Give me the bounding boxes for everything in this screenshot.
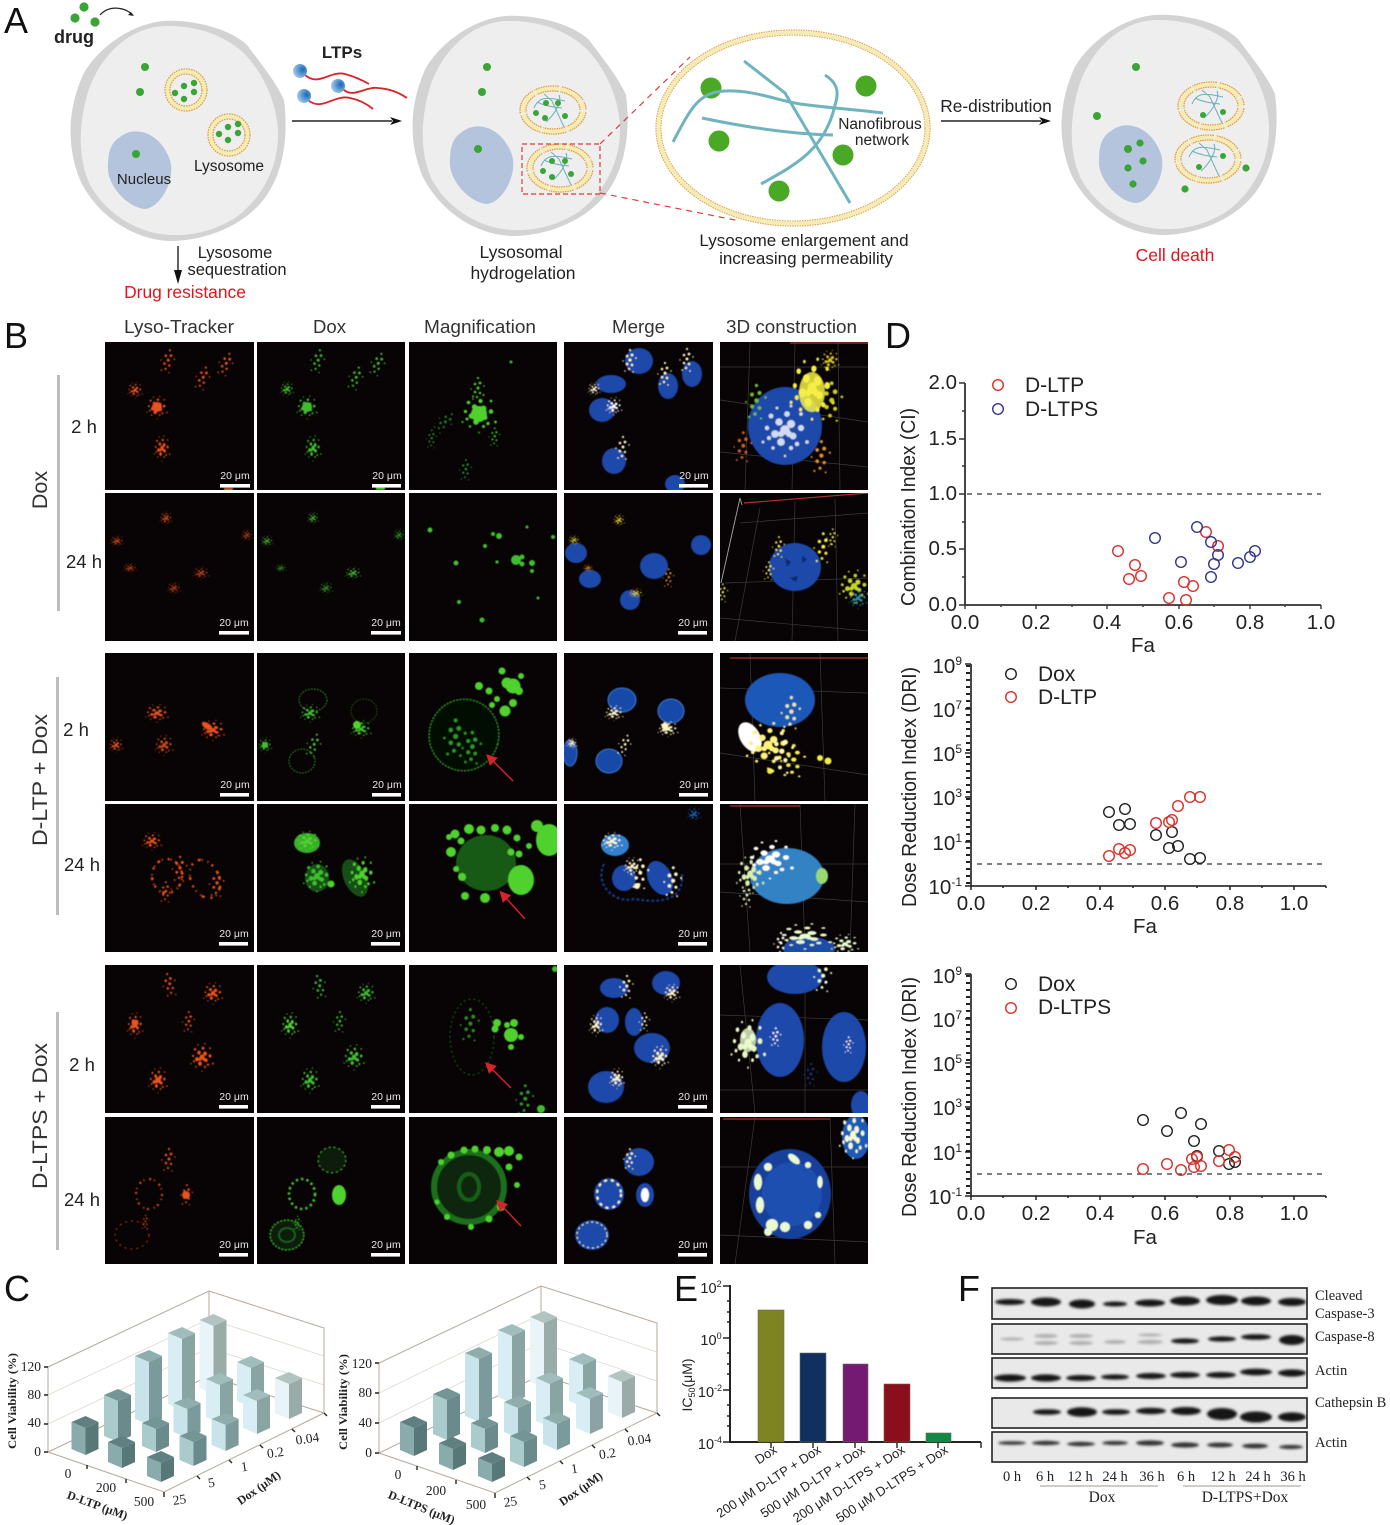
micrograph: D-LTPS 2 h 3D	[720, 965, 868, 1113]
group label: D-LTPS + Dox: 2 h	[69, 1054, 95, 1075]
western blot: Actin 2	[992, 1432, 1348, 1462]
blot time and treatment labels: 24 h	[1245, 1469, 1271, 1485]
chart: DRI with D-LTPS: 0.4	[1086, 1202, 1114, 1225]
micrograph: D-LTP 24 h Dox: 20 μm	[371, 928, 401, 940]
axis labels: Cell Viability (%)	[336, 1354, 350, 1450]
western blot: Actin 1	[992, 1358, 1348, 1388]
3D bar chart: D-LTP: 5	[207, 1475, 216, 1490]
group label: D-LTPS + Dox	[29, 1012, 100, 1250]
chart: Combination Index vs Fa: Fa	[1131, 634, 1156, 657]
chart: DRI with D-LTP: Fa	[1133, 915, 1158, 938]
chart: DRI with D-LTPS: Dose Reduction Index (DRI)	[898, 977, 921, 1217]
chart: DRI with D-LTP: 10	[932, 699, 955, 722]
panel A: cell death stage	[1062, 15, 1277, 235]
leaky lysosome, lower	[1175, 135, 1241, 183]
zoom connector lines	[600, 57, 740, 221]
micrograph: D-LTP 2 h 3D	[720, 653, 868, 801]
column headings: Magnification	[424, 317, 536, 337]
micrograph: D-LTPS 24 h Lyso-Tracker: 20 μm	[219, 1239, 249, 1251]
chart: Combination Index vs Fa: Combination Index (CI)	[897, 408, 920, 606]
legend: D-LTPS	[1038, 996, 1111, 1019]
enlarged lysosome with nanofibrous network	[656, 30, 930, 226]
chart: DRI with D-LTPS: Fa	[1133, 1226, 1158, 1249]
3D bar chart: D-LTP: 0.2	[266, 1444, 285, 1461]
chart: DRI with D-LTP: 10	[932, 832, 955, 855]
micrograph: Dox 2 h Dox	[257, 342, 405, 490]
lysosome sequestration outcome: sequestration	[187, 261, 287, 279]
column headings	[124, 317, 857, 337]
micrograph: D-LTPS 2 h merge	[564, 965, 713, 1113]
chart: DRI with D-LTP: 5	[955, 742, 962, 756]
bar chart: IC50: 2	[717, 1279, 722, 1289]
chart: DRI with D-LTP: 3	[955, 786, 962, 800]
column headings: Dox	[313, 317, 346, 337]
D-LTP points	[1113, 527, 1223, 605]
chart: DRI with D-LTPS: 5	[955, 1052, 962, 1066]
chart: DRI with D-LTPS: 10	[932, 965, 955, 988]
micrograph: D-LTPS 2 h merge: 20 μm	[678, 1091, 708, 1103]
chart: Combination Index vs Fa: 1.0	[928, 482, 957, 505]
micrograph: Dox 24 h magnification	[409, 493, 557, 641]
micrograph: D-LTPS 24 h Dox	[257, 1117, 405, 1264]
label: Lysosome enlargement: increasing permeability	[719, 249, 893, 268]
micrograph: Dox 2 h Dox: 20 μm	[372, 470, 402, 482]
column headings: 3D construction	[726, 317, 857, 337]
bar chart: IC50: 10	[698, 1437, 714, 1453]
axis labels: Cell Viability (%)	[5, 1353, 19, 1449]
lysosome sequestration outcome	[124, 244, 287, 302]
micrograph: D-LTPS 24 h merge	[564, 1117, 713, 1264]
micrograph: D-LTPS 24 h magnification	[409, 1117, 557, 1264]
blot time and treatment labels: 6 h	[1036, 1469, 1055, 1485]
zoom box	[522, 144, 600, 194]
chart: DRI with D-LTP: 0.6	[1151, 892, 1179, 915]
chart: Combination Index vs Fa: 0.8	[1236, 611, 1264, 634]
chart: DRI with D-LTPS: 0.2	[1022, 1202, 1050, 1225]
chart: DRI with D-LTP: -1	[951, 875, 962, 889]
3D bar chart: D-LTPS: 120	[352, 1356, 372, 1371]
chart: DRI with D-LTP: 10	[932, 655, 955, 678]
bar chart: IC50: 50	[687, 1388, 697, 1398]
chart: Combination Index vs Fa: 0.5	[928, 537, 957, 560]
chart: Combination Index vs Fa: 0.6	[1165, 611, 1193, 634]
micrograph: Dox 24 h Lyso-Tracker	[105, 493, 254, 641]
micrograph: Dox 24 h Lyso-Tracker: 20 μm	[219, 617, 249, 629]
legend: Dox	[1038, 663, 1076, 686]
3D bar chart: D-LTPS: 0	[395, 1467, 402, 1482]
label: Lysosome enlargement: Lysosome enlargement and	[699, 231, 909, 250]
chart: DRI with D-LTP: 9	[955, 654, 962, 668]
micrograph: D-LTPS 2 h Lyso-Tracker	[105, 965, 254, 1113]
3D bar chart: D-LTP: 0.04	[295, 1429, 320, 1448]
chart: DRI with D-LTPS	[898, 964, 1326, 1249]
category labels: 500 μM D-LTP + Dox	[758, 1442, 868, 1521]
group label: D-LTP + Dox: 24 h	[64, 854, 100, 875]
panel letter C: C	[4, 1268, 30, 1309]
arrow: LTP treatment	[292, 120, 392, 122]
micrograph: D-LTPS 24 h merge: 20 μm	[678, 1239, 708, 1251]
chart: DRI with D-LTP: 0.4	[1086, 892, 1114, 915]
lysosome with drug, lower	[208, 114, 250, 156]
micrograph: Dox 24 h Dox: 20 μm	[371, 617, 401, 629]
3D bar chart: D-LTPS: 40	[358, 1415, 372, 1430]
chart: Combination Index vs Fa: 0.0	[928, 593, 957, 616]
bar chart: IC50	[679, 1279, 981, 1525]
chart: DRI with D-LTP: 10	[932, 787, 955, 810]
micrograph: Dox 2 h Lyso-Tracker: 20 μm	[220, 470, 250, 482]
label: Lysosome enlargement	[699, 231, 909, 268]
group label: D-LTPS + Dox: 24 h	[64, 1189, 100, 1210]
3D bar chart: D-LTPS: 0.04	[627, 1430, 652, 1449]
bar chart: IC50: IC	[679, 1398, 695, 1412]
icon: free drug dots in cytoplasm	[132, 63, 149, 158]
panel letter E: E	[674, 1268, 698, 1309]
LTPs lipid molecules icon	[293, 43, 407, 109]
blot time and treatment labels: D-LTPS+Dox	[1202, 1489, 1289, 1506]
chart: DRI with D-LTPS: 0.0	[957, 1202, 985, 1225]
chart: DRI with D-LTP	[898, 654, 1326, 938]
category labels: 200 μM D-LTP + Dox	[714, 1442, 824, 1521]
micrograph: Dox 24 h merge: 20 μm	[678, 617, 708, 629]
3D bar chart: D-LTPS: 500	[466, 1497, 486, 1512]
category labels	[714, 1442, 951, 1525]
Dox points	[1104, 804, 1205, 864]
column headings: Lyso-Tracker	[124, 317, 234, 337]
chart: Combination Index vs Fa: 1.0	[1307, 611, 1335, 634]
bar chart: IC50: 10	[700, 1333, 717, 1349]
micrograph: D-LTP 2 h merge	[564, 653, 713, 801]
western blot: Cathepsin B: Cathepsin B	[1315, 1395, 1386, 1411]
micrograph: Dox 2 h merge	[564, 342, 713, 490]
blot time and treatment labels: 24 h	[1102, 1469, 1128, 1485]
label: Lysosomal hydrogelation	[470, 242, 576, 283]
micrograph: Dox 24 h Dox	[257, 493, 405, 641]
drug icon and label	[54, 2, 134, 47]
bar chart: IC50: 0	[717, 1331, 722, 1341]
category labels: Dox	[752, 1442, 780, 1467]
micrograph: D-LTPS 24 h Dox: 20 μm	[371, 1239, 401, 1251]
chart: DRI with D-LTPS: 10	[929, 1186, 951, 1209]
blot time and treatment labels: 36 h	[1139, 1469, 1165, 1485]
chart: Combination Index vs Fa: 0.4	[1093, 611, 1121, 634]
micrograph: D-LTPS 2 h Dox: 20 μm	[371, 1091, 401, 1103]
group label: Dox: 24 h	[66, 551, 102, 572]
drug spheres	[700, 76, 876, 202]
western blot: Cleaved Caspase-3: Cleaved	[1315, 1288, 1363, 1304]
chart: Combination Index vs Fa	[897, 371, 1335, 657]
micrograph: D-LTPS 2 h magnification	[409, 965, 557, 1113]
micrograph: D-LTPS 2 h Lyso-Tracker: 20 μm	[219, 1091, 249, 1103]
group label: D-LTP + Dox: D-LTP + Dox	[29, 713, 52, 846]
chart: DRI with D-LTPS: -1	[951, 1185, 962, 1199]
category labels: 500 μM D-LTPS + Dox	[833, 1442, 951, 1525]
category labels: 200 μM D-LTPS + Dox	[790, 1442, 908, 1525]
enlarged lysosome with nanofibrous network: Nanofibrous	[838, 116, 922, 133]
bar chart: IC50: 10	[700, 1281, 717, 1297]
micrograph: D-LTP 24 h Lyso-Tracker: 20 μm	[219, 928, 249, 940]
D-LTPS points	[1150, 522, 1260, 582]
blot time and treatment labels: 36 h	[1280, 1469, 1306, 1485]
label: Lysosome: Lysosome	[194, 158, 264, 175]
panel A: cell with sequestered drug	[70, 21, 286, 241]
bar chart: IC50: 10	[698, 1385, 714, 1401]
chart: DRI with D-LTP: 0.2	[1022, 892, 1050, 915]
micrograph: D-LTPS 24 h Lyso-Tracker	[105, 1117, 254, 1264]
western blot: Caspase-8: Caspase-8	[1315, 1329, 1375, 1345]
3D bar chart: D-LTPS: 1	[570, 1461, 579, 1476]
3D bar chart: D-LTPS	[336, 1286, 660, 1525]
panel A: cell with lysosomal hydrogelation	[412, 16, 628, 236]
group label: Dox: Dox	[28, 471, 52, 509]
lysosome sequestration outcome: Lysosome	[198, 244, 272, 262]
blot time and treatment labels: 6 h	[1177, 1469, 1196, 1485]
3D bar chart: D-LTP: 25	[172, 1491, 187, 1508]
hydrogelated lysosome, upper	[520, 86, 586, 134]
micrograph: D-LTP 2 h Dox	[257, 653, 405, 801]
3D bar chart: D-LTP: 200	[96, 1480, 116, 1495]
chart: Combination Index vs Fa: 1.5	[928, 427, 957, 450]
micrograph: D-LTP 24 h Lyso-Tracker	[105, 804, 254, 952]
chart: DRI with D-LTP: 1.0	[1280, 892, 1308, 915]
chart: DRI with D-LTPS: 3	[955, 1096, 962, 1110]
3D bar chart: D-LTPS: 0.2	[598, 1445, 617, 1462]
bar chart: IC50: -2	[714, 1383, 722, 1393]
hydrogelated lysosome, lower	[527, 144, 593, 192]
blot time and treatment labels: 12 h	[1067, 1469, 1093, 1485]
micrograph: D-LTP 24 h 3D	[720, 804, 868, 952]
chart: Combination Index vs Fa: 0.2	[1022, 611, 1050, 634]
bar chart: IC50: -4	[714, 1435, 722, 1445]
bar chart: IC50: (μM)	[679, 1358, 695, 1388]
3D bar chart: D-LTP: 40	[28, 1415, 41, 1430]
group label: D-LTP + Dox: 2 h	[63, 719, 89, 740]
LTPs lipid molecules icon: LTPs	[322, 43, 362, 62]
micrograph: Dox 2 h magnification	[409, 342, 557, 490]
micrograph: D-LTP 2 h magnification	[409, 653, 557, 801]
Dox points	[1138, 1108, 1240, 1169]
3D bar chart: D-LTP: 1	[240, 1459, 249, 1474]
micrograph: D-LTP 24 h merge	[564, 804, 713, 952]
chart: DRI with D-LTP: Dose Reduction Index (DRI)	[898, 667, 921, 907]
panel letter D: D	[885, 315, 911, 356]
blot time and treatment labels: 0 h	[1003, 1469, 1022, 1485]
label: Cell death: Cell death	[1136, 245, 1214, 265]
micrograph: D-LTP 24 h merge: 20 μm	[678, 928, 708, 940]
3D bar chart: D-LTP: 500	[134, 1494, 154, 1509]
3D bar chart: D-LTPS: Dox (μM)	[556, 1469, 605, 1509]
western blot: Cleaved Caspase-3	[992, 1288, 1375, 1322]
micrograph: Dox 2 h merge: 20 μm	[679, 470, 709, 482]
3D bar chart: D-LTP: 120	[21, 1359, 41, 1374]
chart: DRI with D-LTPS: 10	[932, 1009, 955, 1032]
micrograph: D-LTP 2 h Lyso-Tracker	[105, 653, 254, 801]
chart: DRI with D-LTPS: 1.0	[1280, 1202, 1308, 1225]
chart: DRI with D-LTP: 10	[929, 876, 951, 899]
chart: DRI with D-LTP: 0.8	[1216, 892, 1244, 915]
panel letter A: A	[4, 0, 28, 41]
micrograph: D-LTP 24 h magnification	[409, 804, 557, 952]
panel letter B: B	[4, 315, 28, 356]
3D bar chart: D-LTPS: 25	[503, 1493, 518, 1510]
chart: DRI with D-LTP: 10	[932, 743, 955, 766]
micrograph: D-LTPS 24 h 3D	[720, 1117, 868, 1264]
blot time and treatment labels: Dox	[1089, 1489, 1116, 1506]
nanofibers	[673, 61, 883, 203]
D-LTPS points	[1138, 1145, 1240, 1175]
chart: DRI with D-LTPS: 0.6	[1151, 1202, 1179, 1225]
legend	[993, 374, 1098, 421]
chart: Combination Index vs Fa: 2.0	[928, 371, 957, 394]
3D bar chart: D-LTPS: 80	[358, 1385, 372, 1400]
legend: D-LTP	[1038, 686, 1097, 709]
chart: DRI with D-LTPS: 9	[955, 964, 962, 978]
micrograph: Dox 2 h Lyso-Tracker	[105, 342, 254, 490]
lysosome sequestration outcome: Drug resistance	[124, 282, 246, 302]
group label: D-LTPS + Dox: D-LTPS + Dox	[29, 1042, 52, 1189]
drug icon and label: drug	[54, 27, 94, 47]
3D bar chart: D-LTPS: 200	[426, 1483, 446, 1498]
chart: DRI with D-LTPS: 10	[932, 1097, 955, 1120]
micrograph: D-LTP 24 h Dox	[257, 804, 405, 952]
3D bar chart: D-LTP: D-LTP (μM)	[65, 1488, 130, 1523]
panel letter F: F	[958, 1268, 980, 1309]
bars	[758, 1310, 951, 1442]
3D bar chart: D-LTP: Dox (μM)	[234, 1468, 283, 1508]
micrograph: Dox 2 h 3D	[720, 342, 868, 490]
western blot: Actin 2: Actin	[1315, 1435, 1348, 1451]
micrograph: Dox 24 h merge	[564, 493, 713, 641]
chart: DRI with D-LTPS: 10	[932, 1142, 955, 1165]
blot time and treatment labels	[1003, 1469, 1306, 1506]
legend	[1006, 973, 1111, 1019]
arrow: Re-distribution: Re-distribution	[940, 96, 1052, 116]
western blot: Cathepsin B	[992, 1395, 1386, 1428]
micrograph: Dox 24 h 3D	[720, 493, 868, 641]
chart: DRI with D-LTPS: 7	[955, 1008, 962, 1022]
enlarged lysosome with nanofibrous network: network	[855, 132, 909, 149]
column headings: Merge	[612, 317, 665, 337]
micrograph: D-LTPS 2 h Dox	[257, 965, 405, 1113]
legend	[1006, 663, 1097, 709]
legend: Dox	[1038, 973, 1076, 996]
western blot: Caspase-8	[992, 1324, 1375, 1354]
western blot: Actin 1: Actin	[1315, 1363, 1348, 1379]
micrograph: D-LTP 2 h Lyso-Tracker: 20 μm	[220, 779, 250, 791]
3D bar chart: D-LTP: 80	[28, 1387, 41, 1402]
3D bar chart: D-LTP: 0	[34, 1444, 41, 1459]
blot time and treatment labels: 12 h	[1210, 1469, 1236, 1485]
chart: DRI with D-LTPS: 1	[955, 1141, 962, 1155]
chart: DRI with D-LTPS: 10	[932, 1053, 955, 1076]
lysosome with drug, upper	[165, 69, 207, 111]
group label: Dox: 2 h	[71, 416, 97, 437]
chart: DRI with D-LTP: 0.0	[957, 892, 985, 915]
D-LTP points	[1104, 792, 1205, 861]
chart: DRI with D-LTP: 1	[955, 831, 962, 845]
micrograph: D-LTP 2 h Dox: 20 μm	[372, 779, 402, 791]
group label: D-LTP + Dox	[29, 677, 100, 915]
3D bar chart: D-LTP	[5, 1291, 327, 1523]
label: Nucleus: Nucleus	[117, 171, 171, 188]
label: Lysosomal hydrogelation: hydrogelation	[470, 263, 576, 283]
group label: Dox	[28, 375, 102, 611]
legend: D-LTPS	[1025, 398, 1098, 421]
legend: D-LTP	[1025, 374, 1084, 397]
chart: DRI with D-LTPS: 0.8	[1216, 1202, 1244, 1225]
micrograph: D-LTP 2 h merge: 20 μm	[679, 779, 709, 791]
chart: DRI with D-LTP: 7	[955, 698, 962, 712]
leaky lysosome, upper	[1178, 82, 1244, 130]
chart: Combination Index vs Fa: 0.0	[951, 611, 979, 634]
3D bar chart: D-LTPS: 5	[538, 1477, 547, 1492]
label: Lysosomal hydrogelation: Lysosomal	[480, 242, 562, 262]
western blot: Cleaved Caspase-3: Caspase-3	[1315, 1306, 1375, 1322]
3D bar chart: D-LTP: 0	[65, 1466, 72, 1481]
3D bar chart: D-LTPS: 0	[365, 1445, 372, 1460]
